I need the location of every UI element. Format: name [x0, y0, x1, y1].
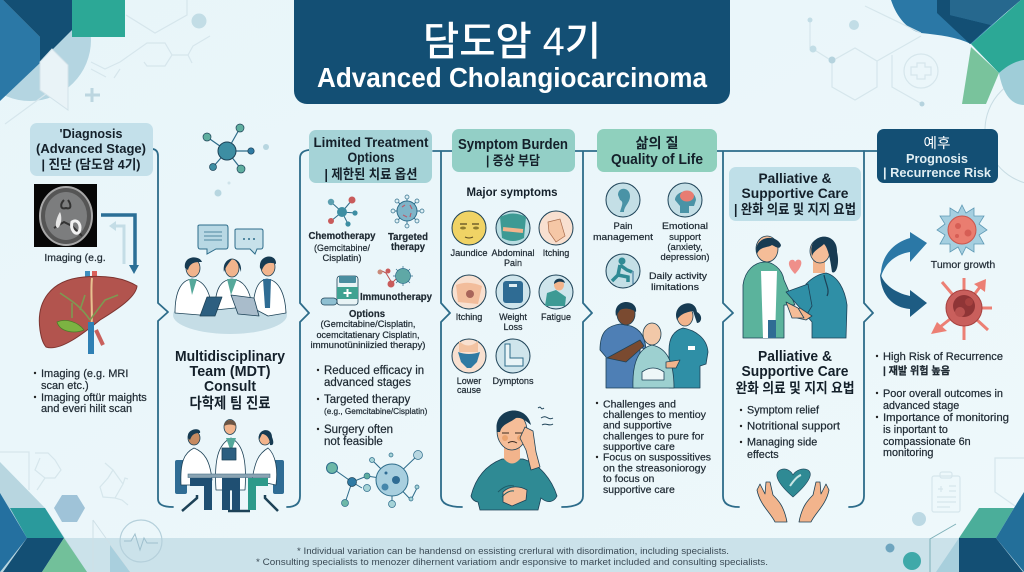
text: treatment bullets: Targeted therapy [324, 394, 411, 406]
icon: tumor growth cell [937, 205, 987, 255]
heading: prognosis [877, 129, 998, 183]
title: Korean: 담도암 4기 [423, 20, 601, 64]
footnote: * Consulting specialists to menozer dihernent variatiom andr esponsive to market included and consulting specialists. [256, 557, 768, 568]
heading: palliative section [736, 348, 854, 396]
text: quality of life bullets: challenges to mentioy [603, 409, 707, 421]
heading: treatment options [309, 130, 432, 183]
labels: symptoms row 1 [450, 248, 569, 268]
heading: prognosis: 예후 [924, 135, 951, 151]
heading: prognosis: Prognosis [906, 151, 968, 166]
text: treatment bullets: (e.g., Gemcitabine/Cisplatin) [324, 407, 428, 416]
heading: MDT consult: Team (MDT) [190, 363, 270, 380]
heading: palliative box [729, 167, 861, 221]
heading: symptom burden [452, 129, 575, 172]
heading: palliative box: | 완화 의료 및 지지 요법 [734, 202, 856, 217]
text: immunotherapy options [310, 291, 432, 350]
heading: symptom burden: | 증상 부담 [486, 153, 540, 168]
icon: cycle arrows [880, 232, 927, 317]
panel: palliative and supportive care [729, 167, 861, 522]
labels: symptoms row 3: Dymptons [492, 376, 534, 386]
labels: symptoms row 2: Itching [456, 312, 482, 322]
icon: medicine bottle [321, 276, 358, 305]
illustration: sick man [471, 407, 557, 510]
panel: limited treatment options [308, 130, 432, 508]
text: prognosis bullets: monitoring [883, 447, 933, 459]
footnote: * Individual variation can be handensd on essisting crerlural with disordimation, including specialists. [297, 546, 729, 557]
heading: quality of life: Quality of Life [611, 151, 703, 168]
panel: diagnosis [30, 123, 153, 415]
heading: MDT consult: Consult [204, 378, 256, 395]
labels: chemotherapy, targeted therapy: Chemotherapy [308, 231, 376, 242]
labels: pain, emotional support: Pain [613, 221, 633, 232]
text: prognosis bullets [876, 351, 1009, 459]
header banner [294, 0, 730, 104]
labels: symptoms row 1: Pain [504, 258, 522, 268]
text: prognosis bullets: Poor overall outcomes in [883, 388, 1003, 400]
heading: MDT consult: Multidisciplinary [175, 348, 286, 365]
icon: lower body [452, 339, 486, 373]
heading: palliative box: Supportive Care [742, 185, 849, 201]
icon: fatigue [539, 275, 573, 309]
text: immunotherapy options: immunotüniniizied therapy) [310, 340, 426, 350]
heading: treatment options: Options [348, 150, 394, 165]
heading: treatment options: | 제한된 치료 옵션 [324, 167, 418, 182]
text: treatment bullets: not feasible [324, 436, 383, 448]
text: palliative bullets: Managing side [747, 436, 817, 448]
text: quality of life bullets: Focus on suspossitives [603, 452, 711, 464]
caption: imaging: Imaging (e.g. [44, 252, 106, 264]
heading: MDT consult: 다학제 팀 진료 [190, 395, 271, 412]
heading: prognosis: | Recurrence Risk [883, 165, 992, 180]
decoration: top-left corner shapes [0, 0, 210, 124]
heading: diagnosis: (Advanced Stage) [36, 141, 146, 156]
illustration: caregivers and patient [600, 302, 708, 388]
MRI brain image [34, 184, 97, 247]
icon: hands holding heart [757, 469, 829, 522]
icon: itching torso [452, 275, 486, 309]
icon: toilet [496, 339, 530, 373]
panel: multidisciplinary team [173, 124, 287, 511]
labels: symptoms row 1: Jaundice [450, 248, 488, 258]
footnote [256, 546, 768, 568]
subheading: major symptoms: Major symptoms [466, 187, 558, 199]
labels: symptoms row 1: Abdominal [492, 248, 534, 258]
heading: symptom burden: Symptom Burden [458, 137, 568, 153]
text: quality of life bullets: challenges to pure for [603, 430, 704, 442]
text: quality of life bullets: on the streasoniorogy [603, 462, 707, 474]
labels: pain, emotional support: support [669, 232, 701, 243]
text: prognosis bullets: compassionate 6n [883, 436, 971, 448]
heading: palliative section: 완화 의료 및 지지 요법 [736, 380, 854, 396]
labels: symptoms row 2: Weight [499, 312, 527, 322]
labels: pain, emotional support [593, 221, 710, 263]
illustration: doctors discussing [173, 225, 287, 334]
icon: tumor spreading [931, 278, 992, 340]
icon: abdominal pain [496, 211, 530, 245]
text: quality of life bullets: Challenges and [603, 398, 676, 410]
heading: diagnosis [30, 123, 153, 176]
text: imaging bullets: scan etc.) [41, 380, 89, 392]
heading: palliative box: Palliative & [758, 170, 832, 186]
text: imaging bullets: Imaging oftür maights [41, 392, 147, 404]
label: daily activity: limitations [651, 282, 699, 293]
labels: symptoms row 3: cause [457, 385, 481, 395]
labels: symptoms row 1: Itching [543, 248, 569, 258]
icon: molecule [203, 124, 269, 196]
heading: palliative section: Palliative & [758, 348, 832, 365]
text: quality of life bullets: to focus on [603, 473, 655, 485]
decoration: top-right corner shapes [808, 0, 1024, 185]
icon: jaundice [452, 211, 486, 245]
icon: chemotherapy molecule [328, 196, 358, 227]
panel: symptom burden [450, 129, 575, 510]
labels: pain, emotional support: Emotional [662, 221, 708, 232]
heading: diagnosis: 'Diagnosis [60, 126, 122, 141]
panel: prognosis [876, 129, 1009, 459]
text: palliative bullets [740, 404, 840, 461]
labels: chemotherapy, targeted therapy: Cisplatin) [322, 253, 362, 263]
text: treatment bullets [317, 365, 428, 448]
illustration: team at table [175, 420, 284, 511]
labels: chemotherapy, targeted therapy [308, 231, 428, 263]
heading: quality of life: 삶의 질 [636, 135, 678, 151]
arrow: imaging to liver [101, 215, 139, 274]
icon: emotional support [668, 183, 702, 217]
label: daily activity: Daily activity [649, 271, 707, 282]
text: imaging bullets [34, 368, 147, 415]
heading: diagnosis: | 진단 (담도암 4기) [42, 157, 140, 172]
icon: immunotherapy cell [378, 266, 413, 288]
text: prognosis bullets: | 재발 위험 높음 [883, 364, 950, 377]
text: palliative bullets: Symptom relief [747, 404, 820, 416]
label: daily activity [649, 271, 707, 293]
labels: chemotherapy, targeted therapy: therapy [391, 242, 425, 253]
decoration: bottom-right corner shapes [886, 458, 1024, 572]
text: quality of life bullets: and supportive [603, 420, 672, 432]
heading: treatment options: Limited Treatment [314, 135, 429, 150]
text: quality of life bullets [596, 398, 711, 496]
text: imaging bullets: Imaging (e.g. MRI [41, 368, 128, 380]
heading: quality of life [597, 129, 717, 172]
icon: pain management [606, 183, 640, 217]
icon: targeted therapy virus [391, 195, 424, 228]
labels: chemotherapy, targeted therapy: (Gemcitabine/ [314, 243, 370, 253]
heading: palliative section: Supportive Care [742, 363, 848, 380]
text: immunotherapy options: Immunotherapy [360, 291, 432, 303]
subtitle: English: Advanced Cholangiocarcinoma [317, 62, 707, 93]
flow brackets between columns [153, 149, 877, 507]
labels: pain, emotional support: depression) [660, 252, 710, 263]
labels: symptoms row 2: Loss [503, 322, 523, 332]
text: palliative bullets: effects [747, 449, 779, 461]
icon: liver [39, 271, 137, 354]
text: prognosis bullets: Importance of monitoring [883, 412, 1009, 424]
heading: MDT consult [175, 348, 286, 412]
icon: weight scale [496, 275, 530, 309]
text: prognosis bullets: advanced stage [883, 400, 959, 412]
footer band background [0, 538, 1024, 572]
label: tumor growth: Tumor growth [931, 259, 995, 271]
text: prognosis bullets: is inportant to [883, 424, 948, 436]
illustration: doctor comforting patient [743, 236, 847, 338]
text: immunotherapy options: (Gemcitabine/Cisplatin, [320, 319, 416, 329]
text: imaging bullets: and everi hilit scan [41, 403, 132, 415]
illustration: virus and molecules [326, 450, 422, 508]
decoration: bottom-left corner shapes [0, 452, 162, 572]
text: treatment bullets: Surgery often [324, 424, 393, 436]
labels: chemotherapy, targeted therapy: Targeted [388, 232, 428, 243]
text: quality of life bullets: supportive care [603, 484, 675, 496]
text: prognosis bullets: High Risk of Recurrence [883, 351, 1003, 363]
text: treatment bullets: advanced stages [324, 377, 411, 389]
text: immunotherapy options: ocemcitatienary Cisplatin, [316, 330, 420, 340]
labels: pain, emotional support: (anxiety, [667, 242, 703, 253]
text: immunotherapy options: Options [349, 309, 385, 320]
text: palliative bullets: Notritional support [747, 420, 840, 432]
panel: quality of life [593, 129, 717, 496]
icon: itching hand [539, 211, 573, 245]
labels: symptoms row 2 [456, 312, 571, 332]
labels: pain, emotional support: management [593, 232, 653, 243]
text: quality of life bullets: supportive care [603, 441, 675, 453]
labels: symptoms row 2: Fatigue [541, 312, 571, 322]
text: treatment bullets: Reduced efficacy in [324, 365, 424, 377]
icon: daily activity [606, 254, 640, 288]
labels: symptoms row 3: Lower [457, 376, 481, 386]
labels: symptoms row 3 [457, 376, 534, 395]
